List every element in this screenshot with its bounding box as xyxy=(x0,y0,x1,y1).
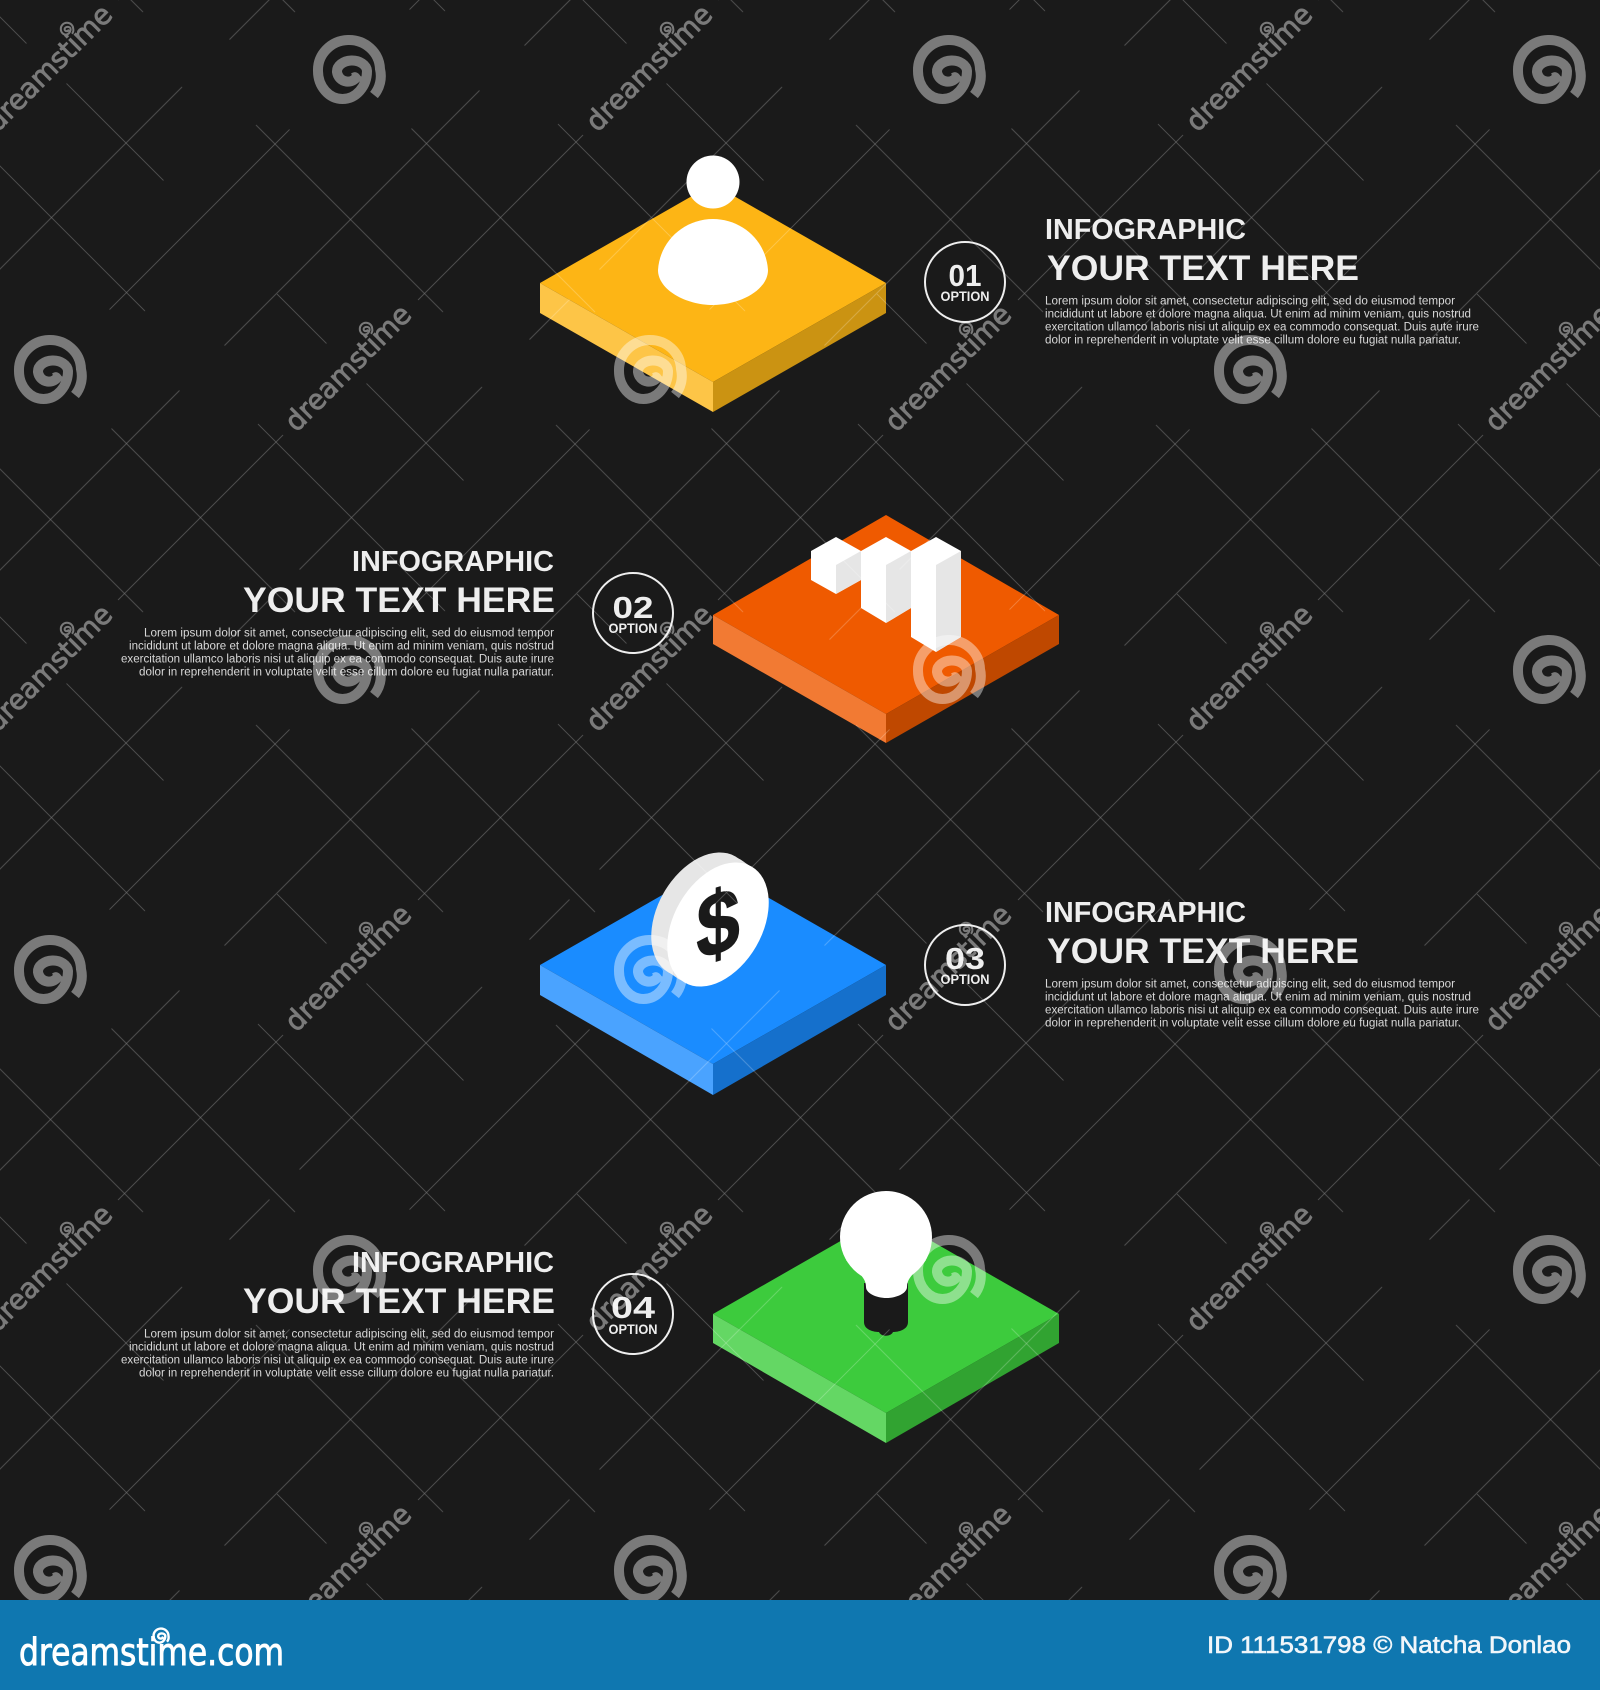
badge: option 01 xyxy=(925,242,1005,322)
icon: light bulb xyxy=(840,1191,932,1336)
text block: option 04: Lorem ipsum dolor sit amet, consectetur adipiscing elit, sed do eiusmod tempor xyxy=(144,1328,554,1340)
text block: option 02: INFOGRAPHIC xyxy=(352,546,554,578)
icon: bar chart xyxy=(811,537,961,652)
text block: option 02: exercitation ullamco laboris nisi ut aliquip ex ea commodo consequat. Duis aute irure xyxy=(121,654,554,666)
panel: option 01 tile xyxy=(540,184,886,412)
watermark overlay: dreamstime xyxy=(278,298,418,438)
text block: option 02: incididunt ut labore et dolore magna aliqua. Ut enim ad minim veniam, quis nostrud xyxy=(129,640,554,652)
text block: option 01: INFOGRAPHIC xyxy=(1045,214,1246,246)
text block: option 02 xyxy=(121,546,555,678)
text block: option 03: exercitation ullamco laboris nisi ut aliquip ex ea commodo consequat. Duis aute irure xyxy=(1045,1004,1479,1016)
watermark overlay: dreamstime xyxy=(1179,1198,1319,1338)
panel: option 02 tile xyxy=(713,515,1059,743)
text block: option 04: dolor in reprehenderit in voluptate velit esse cillum dolore eu fugiat nulla pariatur. xyxy=(139,1368,554,1380)
text block: option 03: Lorem ipsum dolor sit amet, consectetur adipiscing elit, sed do eiusmod tempor xyxy=(1045,978,1455,990)
text block: option 04: exercitation ullamco laboris nisi ut aliquip ex ea commodo consequat. Duis aute irure xyxy=(121,1354,554,1366)
badge: option 02 xyxy=(593,573,673,653)
watermark overlay: dreamstime xyxy=(878,898,1018,1038)
watermark overlay: dreamstime xyxy=(579,1198,719,1338)
text block: option 03: YOUR TEXT HERE xyxy=(1047,932,1359,971)
badge: option 04 xyxy=(593,1274,673,1354)
badge: option 03: 03 xyxy=(945,941,985,976)
text block: option 02: Lorem ipsum dolor sit amet, consectetur adipiscing elit, sed do eiusmod tempor xyxy=(144,628,554,640)
badge: option 01: OPTION xyxy=(940,289,990,304)
badge: option 01: 01 xyxy=(948,258,982,293)
watermark overlay: dreamstime xyxy=(878,1498,1018,1638)
text block: option 03: incididunt ut labore et dolore magna aliqua. Ut enim ad minim veniam, quis nostrud xyxy=(1045,992,1471,1004)
panel: option 04 tile xyxy=(713,1215,1059,1443)
watermark overlay: dreamstime xyxy=(278,1498,418,1638)
text block: option 02: YOUR TEXT HERE xyxy=(243,581,555,620)
icon: person xyxy=(658,156,768,305)
text block: option 01: incididunt ut labore et dolore magna aliqua. Ut enim ad minim veniam, quis nostrud xyxy=(1045,308,1471,320)
watermark overlay: dreamstime xyxy=(878,298,1018,438)
badge: option 02: OPTION xyxy=(608,621,658,636)
text block: option 01: exercitation ullamco laboris nisi ut aliquip ex ea commodo consequat. Duis aute irure xyxy=(1045,322,1479,334)
footer logo: dreamstime.com: dreamstime.com xyxy=(19,1631,284,1674)
icon: dollar coin: $ xyxy=(696,867,740,980)
watermark overlay: dreamstime xyxy=(1179,598,1319,738)
text block: option 04: INFOGRAPHIC xyxy=(352,1247,554,1279)
badge: option 03 xyxy=(925,925,1005,1005)
panel: option 03 tile xyxy=(540,866,886,1095)
badge: option 02: 02 xyxy=(612,590,654,625)
text block: option 02: dolor in reprehenderit in voluptate velit esse cillum dolore eu fugiat nulla pariatur. xyxy=(139,666,554,678)
watermark overlay: dreamstime xyxy=(579,598,719,738)
footer credit: ID 111531798 © Natcha Donlao xyxy=(1207,1632,1571,1659)
text block: option 04: YOUR TEXT HERE xyxy=(243,1282,555,1321)
text block: option 01: Lorem ipsum dolor sit amet, consectetur adipiscing elit, sed do eiusmod tempor xyxy=(1045,296,1455,308)
text block: option 04: incididunt ut labore et dolore magna aliqua. Ut enim ad minim veniam, quis nostrud xyxy=(129,1342,554,1354)
text block: option 03: INFOGRAPHIC xyxy=(1045,897,1246,929)
badge: option 04: OPTION xyxy=(608,1322,658,1337)
badge: option 03: OPTION xyxy=(940,972,990,987)
badge: option 04: 04 xyxy=(611,1290,656,1325)
text block: option 01 xyxy=(1045,214,1479,346)
watermark overlay: dreamstime xyxy=(278,898,418,1038)
text block: option 01: dolor in reprehenderit in voluptate velit esse cillum dolore eu fugiat nulla pariatur. xyxy=(1045,334,1461,346)
text block: option 03: dolor in reprehenderit in voluptate velit esse cillum dolore eu fugiat nulla pariatur. xyxy=(1045,1018,1461,1030)
text block: option 01: YOUR TEXT HERE xyxy=(1047,249,1359,288)
text block: option 03 xyxy=(1045,897,1479,1030)
footer bar xyxy=(0,1600,1600,1690)
icon: dollar coin xyxy=(630,834,790,1005)
text block: option 04 xyxy=(121,1247,555,1380)
